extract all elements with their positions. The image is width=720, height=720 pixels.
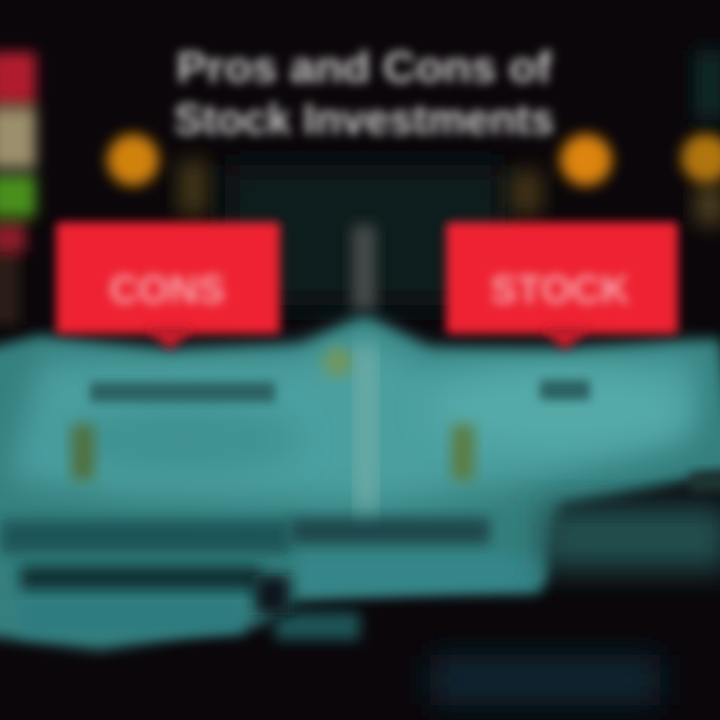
dark text strip: right column	[540, 380, 590, 400]
right red label	[446, 222, 678, 350]
grey centre post	[352, 225, 376, 310]
olive mark: left	[72, 425, 94, 480]
right red label: STOCK	[490, 268, 630, 312]
pale centre divider	[358, 345, 374, 510]
title: Stock Investments	[174, 95, 554, 144]
left red label: CONS	[109, 268, 225, 312]
olive mark: right	[452, 425, 474, 480]
icon: left colour stack	[0, 52, 36, 325]
left red label	[56, 222, 280, 350]
dark text strip: left column	[90, 382, 275, 402]
title: Pros and Cons of	[176, 43, 552, 92]
dark green glow behind centre	[225, 165, 505, 305]
icon: right orange lamp	[510, 134, 612, 215]
icon: far-right orange lamp	[681, 133, 720, 225]
title	[174, 43, 554, 144]
teal landscape panel	[0, 315, 720, 705]
icon: left orange lamp	[107, 134, 208, 215]
dark mark: right edge	[690, 472, 720, 492]
olive mark: centre	[323, 347, 353, 377]
far-right dark teal shape	[695, 50, 720, 120]
